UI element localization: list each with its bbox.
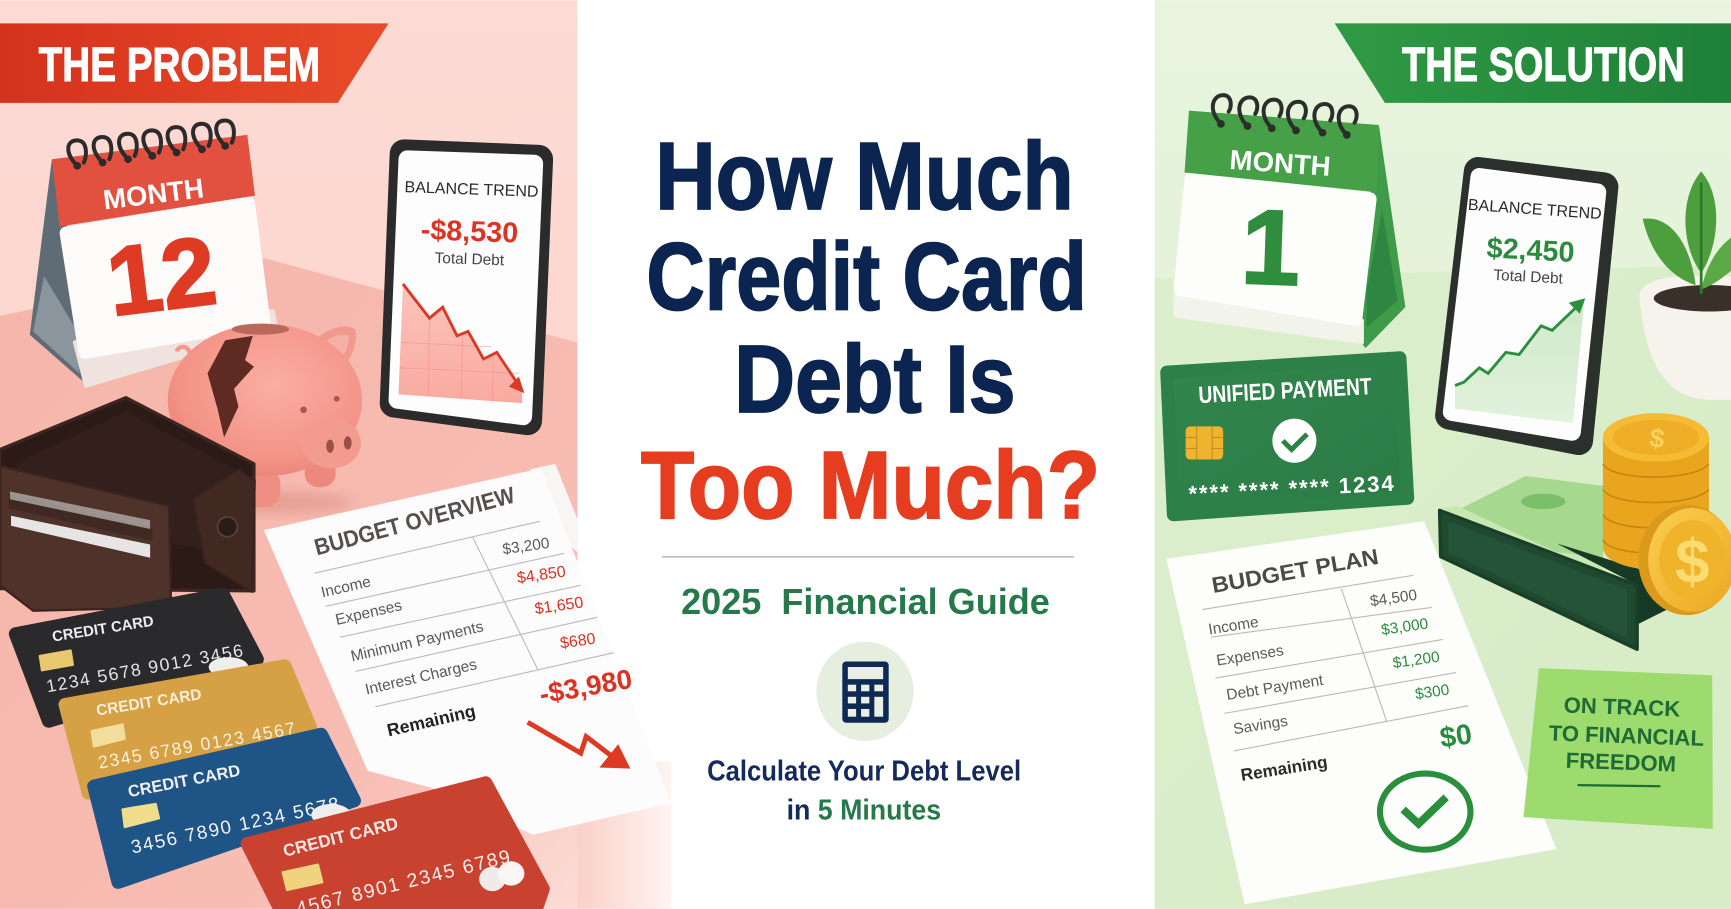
paper: budget overview	[264, 464, 671, 835]
panel: the solution	[1155, 0, 1731, 909]
icon: calendar month 12	[30, 120, 276, 386]
heading: how much credit card debt is too much: Credit Card	[646, 223, 1087, 330]
card: red	[247, 783, 543, 909]
call to action: calculate your debt level: Calculate Your Debt Level	[707, 756, 1021, 788]
subtitle: 2025 financial guide: 2025 Financial Guide	[681, 581, 1050, 622]
sticky note: on track to financial freedom: TO FINANCIAL	[1548, 720, 1704, 751]
banner: the problem	[0, 23, 389, 103]
paper: budget overview: BUDGET OVERVIEW	[311, 482, 518, 560]
card: black	[15, 594, 257, 721]
heading: how much credit card debt is too much: Too Much?	[641, 432, 1100, 539]
card: blue	[94, 734, 354, 882]
heading: how much credit card debt is too much: Debt Is	[734, 326, 1016, 433]
card: red: CREDIT CARD	[281, 814, 400, 861]
paper: budget plan: $4,500	[1369, 587, 1418, 610]
paper: budget plan	[1166, 521, 1557, 904]
icon: cracked piggy bank	[168, 324, 362, 514]
card: gold	[65, 666, 310, 793]
icon: phone balance trend	[394, 154, 539, 421]
icon: calculator	[816, 642, 914, 741]
icon: phone balance trend: Total Debt	[434, 250, 505, 269]
icon: calendar month 1	[1175, 95, 1405, 348]
paper: budget plan: Remaining	[1239, 752, 1329, 785]
paper: budget plan: $0	[1438, 718, 1474, 755]
paper: budget overview: -$3,980	[537, 663, 634, 710]
icon: gold coin stack: $	[1648, 423, 1667, 454]
paper: budget plan: $3,000	[1380, 616, 1429, 639]
sticky note: on track to financial freedom: ON TRACK	[1563, 692, 1681, 722]
icon: unified payment card: UNIFIED PAYMENT	[1198, 374, 1373, 409]
icon: phone balance trend: -$8,530	[420, 214, 519, 250]
icon: gold coin stack: $	[1675, 528, 1710, 597]
card: gold: CREDIT CARD	[95, 686, 203, 720]
paper: budget overview: Interest Charges	[364, 656, 479, 699]
paper: budget plan: $1,200	[1392, 649, 1441, 672]
paper: budget overview: $4,850	[516, 564, 567, 587]
card: gold: 2345 6789 0123 4567	[97, 718, 298, 773]
paper: budget plan: Income	[1207, 614, 1260, 638]
icon: gold coin stack	[1603, 413, 1731, 615]
banner: the problem: THE PROBLEM	[39, 38, 320, 92]
credit cards: stack of four	[15, 594, 543, 909]
heading: how much credit card debt is too much	[641, 123, 1100, 539]
icon: calendar month 1: 1	[1239, 188, 1302, 308]
icon: phone balance trend: BALANCE TREND	[404, 179, 539, 201]
paper: budget overview: Income	[319, 573, 373, 601]
icon: calendar month 12: 12	[101, 215, 222, 337]
paper: budget plan: Debt Payment	[1225, 672, 1325, 704]
card: black: 1234 5678 9012 3456	[45, 640, 246, 696]
paper: budget plan: $300	[1414, 682, 1450, 703]
arrow: downward trend	[528, 722, 630, 769]
icon: brown wallet	[0, 398, 255, 611]
icon: phone balance trend: Total Debt	[1493, 267, 1564, 288]
chart: balance trend	[1455, 298, 1585, 423]
paper: budget plan: BUDGET PLAN	[1210, 544, 1380, 598]
sticky note: on track to financial freedom: FREEDOM	[1565, 748, 1676, 777]
panel: the problem	[0, 0, 671, 909]
chart: falling balance	[399, 284, 524, 403]
icon: unified payment card: **** **** **** 1234	[1188, 471, 1395, 506]
icon: check circle	[1380, 774, 1470, 850]
paper: budget plan: Expenses	[1215, 642, 1285, 670]
icon: green wallet with cash	[1440, 476, 1667, 649]
paper: budget overview: $680	[559, 631, 597, 652]
icon: phone balance trend: BALANCE TREND	[1467, 197, 1602, 223]
paper: budget overview: Expenses	[334, 597, 404, 629]
card: blue: CREDIT CARD	[126, 761, 242, 801]
sticky note: on track to financial freedom	[1523, 668, 1713, 829]
panel: title center	[641, 123, 1100, 826]
banner: the solution	[1335, 23, 1731, 103]
icon: potted plant	[1639, 171, 1731, 400]
icon: calendar month 12: MONTH	[101, 172, 205, 215]
paper: budget overview: Remaining	[385, 701, 477, 740]
paper: budget plan: Savings	[1232, 713, 1289, 738]
paper: budget overview: Minimum Payments	[349, 618, 485, 665]
call to action: calculate your debt level: in 5 Minutes	[787, 794, 941, 826]
paper: budget overview: $3,200	[501, 535, 551, 558]
card: blue: 3456 7890 1234 5678	[129, 792, 343, 857]
icon: calendar month 1: MONTH	[1229, 144, 1332, 182]
call to action: calculate your debt level	[707, 756, 1021, 826]
icon: phone balance trend: $2,450	[1486, 232, 1575, 269]
card: black: CREDIT CARD	[51, 614, 155, 646]
icon: phone balance trend	[1449, 171, 1604, 441]
paper: budget overview: $1,650	[534, 594, 585, 618]
heading: how much credit card debt is too much: How Much	[655, 123, 1074, 230]
icon: unified payment card	[1167, 358, 1408, 515]
